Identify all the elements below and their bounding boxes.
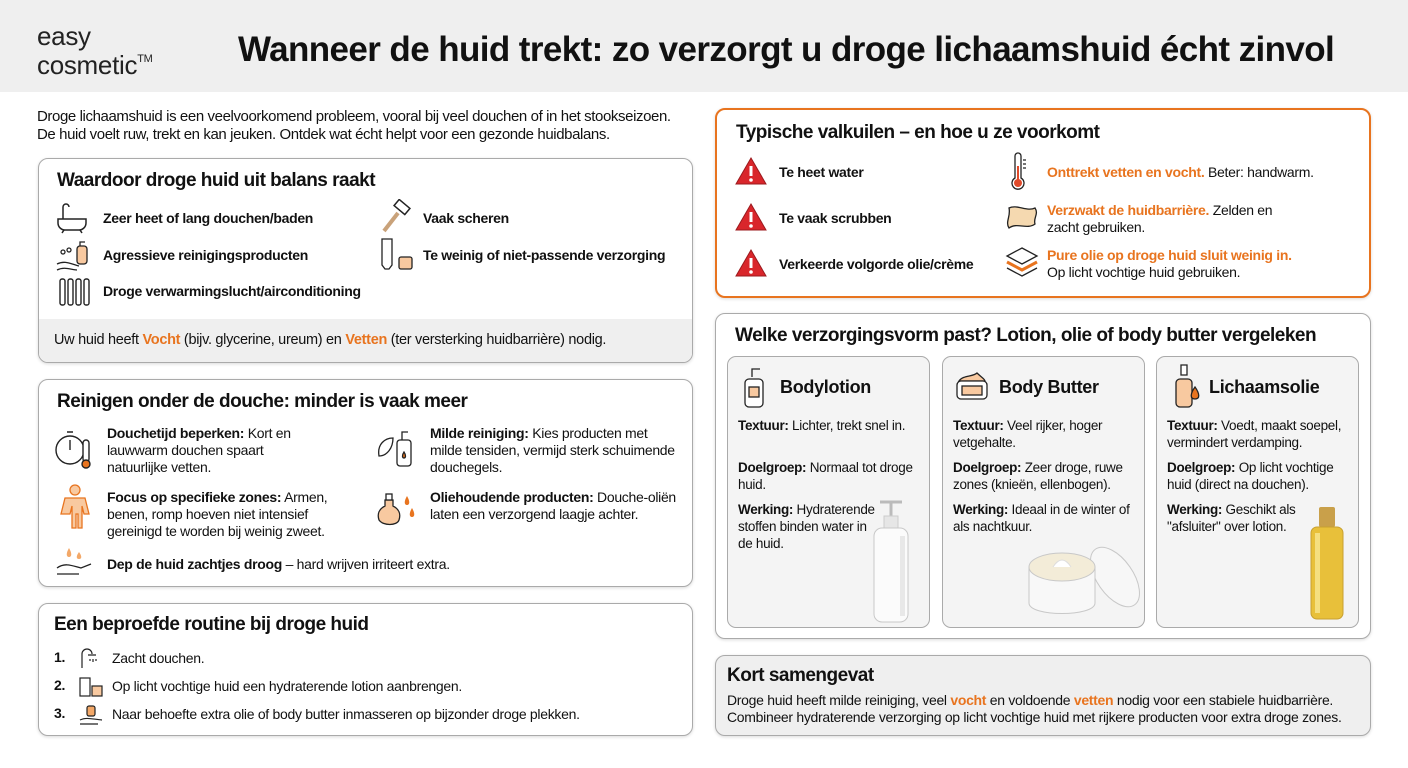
card: lichaamsolie: Lichaamsolie: [1209, 377, 1319, 397]
intro text: [37, 108, 671, 143]
text: douchetijd: Douchetijd beperken: Kort en lauwwarm douchen spaart natuurlijke vetten.: [107, 425, 291, 475]
text: milde reiniging: Milde reiniging: Kies producten met milde tensiden, vermijd sterk schuimende douchegels.: [430, 425, 675, 475]
warning row 2: Te vaak scrubben: [779, 210, 891, 226]
card: bodylotion: Bodylotion: [780, 377, 871, 397]
text cause 2: Vaak scheren: [423, 210, 509, 226]
step 3: 3.: [54, 705, 65, 721]
title: Wanneer de huid trekt: zo verzorgt u droge lichaamshuid écht zinvol: [238, 30, 1334, 69]
text cause 1: Zeer heet of lang douchen/baden: [103, 210, 313, 226]
image: oil bottle: [1310, 507, 1344, 620]
step 1: [54, 648, 204, 668]
panel: cleansing: [38, 379, 693, 587]
text: focus: Focus op specifieke zones: Armen, benen, romp hoeven niet intensief gereinigd te worden bij weinig zweet.: [107, 489, 327, 539]
icon: bath: [57, 203, 87, 234]
image: lotion bottle: [874, 500, 908, 622]
warning row 1: [735, 157, 864, 184]
warning row 1: Te heet water: [779, 164, 864, 180]
card: body butter: Textuur: Veel rijker, hoger vetgehalte.: [953, 418, 1102, 450]
logo: cosmeticTM: [37, 50, 152, 80]
card: bodylotion: Textuur: Lichter, trekt snel in.: [738, 418, 905, 433]
icon: hand drops: [56, 548, 92, 575]
card: body butter: [942, 356, 1145, 628]
heading pitfalls: Typische valkuilen – en hoe u ze voorkomt: [736, 122, 1099, 143]
icon: tube and jar: [381, 238, 413, 270]
card: bodylotion: [727, 356, 930, 628]
tip 1: [1011, 152, 1314, 190]
bottom strip: [39, 319, 694, 364]
card: lichaamsolie: Textuur: Voedt, maakt soepel, vermindert verdamping.: [1167, 418, 1341, 450]
step 1: 1.: [54, 649, 65, 665]
heading routine: Een beproefde routine bij droge huid: [54, 614, 369, 635]
text: deppen: Dep de huid zachtjes droog – hard wrijven irriteert extra.: [107, 556, 450, 572]
step 2: Op licht vochtige huid een hydraterende lotion aanbrengen.: [112, 678, 462, 694]
image: cream jar: [1028, 546, 1140, 614]
card: lichaamsolie: Doelgroep: Op licht vochtige huid (direct na douchen).: [1167, 460, 1333, 492]
step 3: Naar behoefte extra olie of body butter inmasseren op bijzonder droge plekken.: [112, 706, 580, 722]
text cause 4: Te weinig of niet-passende verzorging: [423, 247, 665, 263]
warning row 2: [735, 203, 891, 230]
text cause 3: Agressieve reinigingsproducten: [103, 247, 308, 263]
card: body butter: Werking: Ideaal in de winter of als nachtkuur.: [953, 502, 1130, 534]
icon: timer: [55, 431, 91, 469]
icon: radiator: [59, 278, 90, 306]
tip 3: Op licht vochtige huid gebruiken.: [1047, 264, 1240, 280]
step 1: Zacht douchen.: [112, 650, 204, 666]
summary text: Droge huid heeft milde reiniging, veel vocht en voldoende vetten nodig voor een stabiele huidbarrière. Combineer hydraterende verzorging op licht vochtige huid met rijkere producten voor extra droge zones.: [727, 692, 1342, 725]
heading cleansing: Reinigen onder de douche: minder is vaak meer: [57, 391, 467, 412]
warning row 3: [735, 249, 974, 276]
tip 3: Pure olie op droge huid sluit weinig in.: [1047, 247, 1292, 263]
icon: razor: [382, 199, 411, 232]
heading causes: Waardoor droge huid uit balans raakt: [57, 170, 375, 191]
tip 3: [1006, 247, 1292, 280]
warning row 3: Verkeerde volgorde olie/crème: [779, 256, 973, 272]
panel: routine: [38, 603, 693, 736]
card: lichaamsolie: Werking: Geschikt als "afsluiter" over lotion.: [1167, 502, 1296, 534]
card: lichaamsolie: [1156, 356, 1359, 628]
text: oliehoudend: Oliehoudende producten: Douche-oliën laten een verzorgend laagje achter.: [430, 489, 676, 522]
logo: easy: [37, 21, 91, 51]
bottom strip: Uw huid heeft Vocht (bijv. glycerine, ureum) en Vetten (ter versterking huidbarrière) nodig.: [54, 332, 606, 348]
icon: body: [60, 484, 90, 529]
heading summary: Kort samengevat: [727, 665, 874, 686]
card: body butter: Body Butter: [999, 377, 1099, 397]
card: body butter: Doelgroep: Zeer droge, ruwe zones (knieën, ellenbogen).: [953, 460, 1123, 492]
icon: soap hands: [56, 241, 88, 271]
intro text: De huid voelt ruw, trekt en kan jeuken. Ontdek wat écht helpt voor een gezonde huidbalans.: [37, 126, 610, 143]
panel: summary: [715, 655, 1371, 736]
step 2: [54, 677, 462, 697]
tip 1: Onttrekt vetten en vocht. Beter: handwarm.: [1047, 164, 1314, 180]
card: bodylotion: Doelgroep: Normaal tot droge huid.: [738, 460, 913, 492]
heading comparison: Welke verzorgingsvorm past? Lotion, olie of body butter vergeleken: [735, 325, 1316, 346]
tip 2: Verzwakt de huidbarrière. Zelden en zacht gebruiken.: [1047, 202, 1272, 235]
intro text: Droge lichaamshuid is een veelvoorkomend probleem, vooral bij veel douchen of in het stookseizoen.: [37, 108, 671, 125]
card: bodylotion: Werking: Hydraterende stoffen binden water in de huid.: [738, 502, 875, 551]
panel: pitfalls: [715, 108, 1371, 298]
step 2: 2.: [54, 677, 65, 693]
header: [0, 0, 1408, 92]
icon: oil bottles: [378, 493, 414, 526]
panel: comparison: [715, 313, 1371, 639]
text cause 5: Droge verwarmingslucht/airconditioning: [103, 283, 361, 299]
panel: causes: [38, 158, 693, 363]
logo: [37, 21, 152, 80]
icon: leaf bottle: [378, 431, 412, 467]
